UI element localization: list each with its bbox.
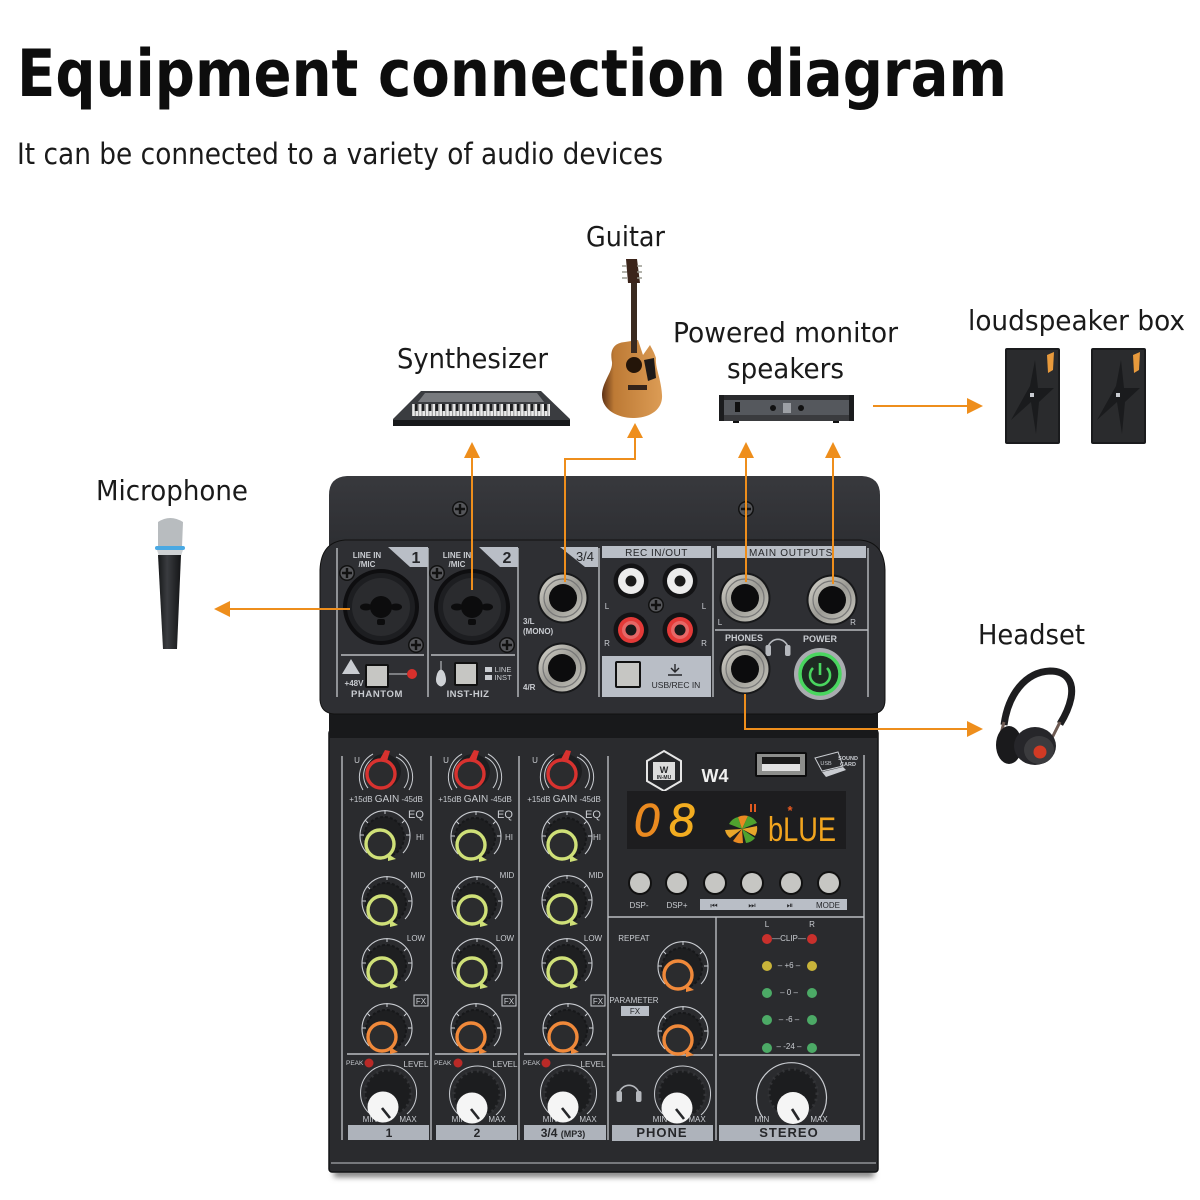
LED display: * bbox=[787, 803, 793, 818]
level knobs: PEAK bbox=[434, 1060, 452, 1067]
EQ high knobs: HI bbox=[593, 833, 601, 842]
icon: headset bbox=[996, 671, 1072, 765]
EQ mid knobs: MID bbox=[589, 871, 604, 880]
LED display: 8 bbox=[669, 794, 695, 846]
phones and power: POWER bbox=[803, 634, 837, 644]
mixer shadow bbox=[334, 1170, 874, 1177]
instrument switch bbox=[436, 661, 512, 700]
input 1 tag: /MIC bbox=[359, 560, 376, 569]
input 2 tag: /MIC bbox=[449, 560, 466, 569]
level meter: – +6 – bbox=[778, 961, 801, 970]
EQ mid knobs: MID bbox=[411, 871, 426, 880]
level knobs: MAX bbox=[399, 1115, 417, 1124]
main outputs section: MAIN OUTPUTS bbox=[749, 548, 833, 559]
REC IN/OUT section: L bbox=[702, 602, 707, 611]
input 1 tag: 1 bbox=[412, 550, 421, 567]
XLR connectors bbox=[339, 565, 515, 653]
REC IN/OUT section: R bbox=[604, 639, 610, 648]
phones and power bbox=[720, 633, 846, 700]
level knobs: LEVEL bbox=[581, 1060, 606, 1069]
stereo label bar bbox=[719, 1125, 860, 1141]
label: Powered monitor speakers: speakers bbox=[727, 352, 844, 385]
REC IN/OUT section: L bbox=[605, 602, 610, 611]
channel label bars: 2 bbox=[474, 1126, 481, 1140]
input 3/4 jacks: 3/L bbox=[523, 617, 535, 626]
stereo volume knob bbox=[755, 1063, 828, 1124]
logo bbox=[647, 751, 681, 791]
gain knobs bbox=[349, 750, 601, 805]
input 2 tag: 2 bbox=[503, 550, 512, 567]
LED display bbox=[627, 791, 846, 849]
instrument switch: INST bbox=[494, 673, 512, 682]
icon: synthesizer bbox=[393, 391, 570, 426]
model name: W4 bbox=[702, 766, 728, 786]
logo: IN-MU bbox=[657, 775, 672, 781]
EQ high knobs: EQ bbox=[408, 809, 424, 821]
gain knobs: U bbox=[532, 756, 538, 765]
panel: rear connectors bbox=[320, 540, 885, 714]
input 2 tag: LINE IN bbox=[443, 551, 471, 560]
label: Guitar: Guitar bbox=[586, 220, 665, 253]
REC IN/OUT section: R bbox=[701, 639, 707, 648]
EQ high knobs: HI bbox=[505, 833, 513, 842]
FX knobs: FX bbox=[593, 997, 604, 1006]
icon: guitar bbox=[602, 259, 662, 418]
media buttons: ⏮ bbox=[710, 901, 718, 910]
arrow: mixer to microphone bbox=[214, 601, 350, 617]
level knobs: MAX bbox=[488, 1115, 506, 1124]
FX knobs: FX bbox=[416, 997, 427, 1006]
level knobs: MIN bbox=[452, 1115, 467, 1124]
media buttons bbox=[628, 871, 847, 910]
EQ high knobs: EQ bbox=[585, 809, 601, 821]
level knobs: MAX bbox=[579, 1115, 597, 1124]
arrow: mixer to amplifier right bbox=[825, 442, 841, 584]
phone label bar bbox=[612, 1125, 713, 1141]
arrow: mixer to amplifier left bbox=[738, 442, 754, 582]
instrument switch: LINE bbox=[495, 665, 511, 674]
channel label bars: 3/4 (MP3) bbox=[541, 1126, 585, 1140]
LED display: 0 bbox=[634, 794, 660, 846]
icon: microphone bbox=[155, 518, 185, 649]
sound card icon bbox=[815, 752, 858, 777]
panel: channel strips bbox=[342, 750, 608, 1140]
EQ low knobs: LOW bbox=[407, 934, 426, 943]
media buttons: ⏭ bbox=[748, 901, 756, 910]
REC IN/OUT section: REC IN/OUT bbox=[625, 548, 688, 559]
mixer dark band bbox=[329, 712, 878, 738]
level knobs: MIN bbox=[543, 1115, 558, 1124]
media buttons: ⏯ bbox=[787, 901, 793, 910]
gain knobs: U bbox=[443, 756, 449, 765]
EQ low knobs bbox=[362, 934, 603, 989]
media buttons: MODE bbox=[816, 901, 840, 910]
phone volume knob bbox=[616, 1066, 711, 1124]
top screws bbox=[452, 501, 754, 517]
subtitle: It can be connected to a variety of audio devices bbox=[17, 137, 663, 171]
level knobs: PEAK bbox=[523, 1060, 541, 1067]
mixer front body bbox=[329, 730, 878, 1172]
EQ high knobs bbox=[360, 809, 601, 862]
EQ low knobs: LOW bbox=[584, 934, 603, 943]
arrow: mixer to synthesizer bbox=[464, 442, 480, 590]
main outputs section: R bbox=[850, 618, 856, 627]
instrument switch: INST-HIZ bbox=[447, 689, 489, 700]
USB port bbox=[755, 752, 807, 777]
sound card icon: CARD bbox=[840, 762, 856, 768]
input 2 tag bbox=[443, 547, 518, 569]
EQ low knobs: LOW bbox=[496, 934, 515, 943]
stereo volume knob: MIN bbox=[755, 1115, 770, 1124]
FX parameter knob bbox=[609, 996, 708, 1057]
stereo label bar: STEREO bbox=[759, 1125, 819, 1140]
mixer bbox=[320, 476, 885, 1177]
label: Headset: Headset bbox=[978, 618, 1085, 651]
level meter: – 0 – bbox=[780, 988, 798, 997]
input 3/4 jacks bbox=[523, 547, 598, 694]
REC IN/OUT section bbox=[602, 546, 711, 697]
icon: loudspeaker right bbox=[1091, 348, 1146, 444]
EQ mid knobs bbox=[362, 871, 604, 927]
FX repeat knob: REPEAT bbox=[618, 934, 650, 943]
level meter: —CLIP— bbox=[772, 934, 806, 943]
level meter: L bbox=[765, 920, 770, 929]
main outputs section: L bbox=[718, 618, 723, 627]
level knobs: MIN bbox=[363, 1115, 378, 1124]
EQ mid knobs: MID bbox=[500, 871, 515, 880]
panel: master section bbox=[608, 751, 864, 1141]
level meter: R bbox=[809, 920, 815, 929]
gain knobs: +15dB GAIN -45dB bbox=[349, 794, 423, 805]
channel label bars bbox=[348, 1125, 606, 1140]
phantom power controls: +48V bbox=[345, 679, 364, 688]
level knobs: LEVEL bbox=[493, 1060, 518, 1069]
arrow: mixer to headset bbox=[745, 694, 983, 737]
arrow: amplifier to loudspeakers bbox=[873, 398, 983, 414]
level knobs: LEVEL bbox=[404, 1060, 429, 1069]
logo: W bbox=[660, 765, 669, 775]
channel label bars: 1 bbox=[386, 1126, 393, 1140]
gain knobs: +15dB GAIN -45dB bbox=[527, 794, 601, 805]
FX repeat knob bbox=[618, 934, 708, 992]
level knobs: PEAK bbox=[346, 1060, 364, 1067]
EQ high knobs: EQ bbox=[497, 809, 513, 821]
icon: loudspeaker left bbox=[1005, 348, 1060, 444]
sound card icon: SOUND bbox=[838, 756, 858, 762]
label: Microphone: Microphone bbox=[96, 474, 248, 507]
FX knobs: FX bbox=[504, 997, 515, 1006]
FX knobs bbox=[362, 995, 605, 1054]
sound card icon: USB bbox=[820, 761, 832, 767]
phone label bar: PHONE bbox=[636, 1125, 688, 1140]
LED display: bLUE bbox=[768, 811, 836, 849]
input 3/4 jacks: (MONO) bbox=[523, 627, 554, 636]
media buttons: DSP+ bbox=[666, 901, 688, 910]
gain knobs: +15dB GAIN -45dB bbox=[438, 794, 512, 805]
bottom edge line bbox=[331, 1162, 876, 1164]
input 3/4 jacks: 3/4 bbox=[576, 549, 594, 564]
input 1 tag bbox=[353, 547, 428, 569]
level meter bbox=[762, 920, 817, 1053]
label: Powered monitor speakers: Powered monitor bbox=[673, 316, 898, 349]
phone volume knob: MIN bbox=[653, 1115, 668, 1124]
stereo volume knob: MAX bbox=[810, 1115, 828, 1124]
phone volume knob: MAX bbox=[688, 1115, 706, 1124]
input 1 tag: LINE IN bbox=[353, 551, 381, 560]
input 3/4 jacks: 4/R bbox=[523, 683, 536, 692]
label: Synthesizer: Synthesizer bbox=[397, 342, 548, 375]
title: Equipment connection diagram bbox=[17, 37, 1007, 112]
REC IN/OUT section: USB/REC IN bbox=[652, 680, 700, 690]
FX parameter knob: PARAMETER bbox=[609, 996, 659, 1005]
level meter: – -24 – bbox=[777, 1042, 802, 1051]
level meter: – -6 – bbox=[779, 1015, 800, 1024]
level knobs bbox=[346, 1058, 606, 1124]
arrow: mixer to guitar bbox=[565, 423, 643, 582]
EQ high knobs: HI bbox=[416, 833, 424, 842]
FX parameter knob: FX bbox=[630, 1007, 641, 1016]
phantom power controls bbox=[342, 659, 417, 700]
main outputs section bbox=[717, 546, 866, 627]
mixer top cover bbox=[329, 476, 880, 560]
gain knobs: U bbox=[354, 756, 360, 765]
label: loudspeaker box: loudspeaker box bbox=[968, 304, 1185, 337]
media buttons: DSP- bbox=[629, 901, 649, 910]
icon: power amplifier bbox=[719, 395, 854, 423]
label: Powered monitor speakers bbox=[673, 316, 898, 385]
phones and power: PHONES bbox=[725, 633, 763, 643]
phantom power controls: PHANTOM bbox=[351, 689, 403, 700]
